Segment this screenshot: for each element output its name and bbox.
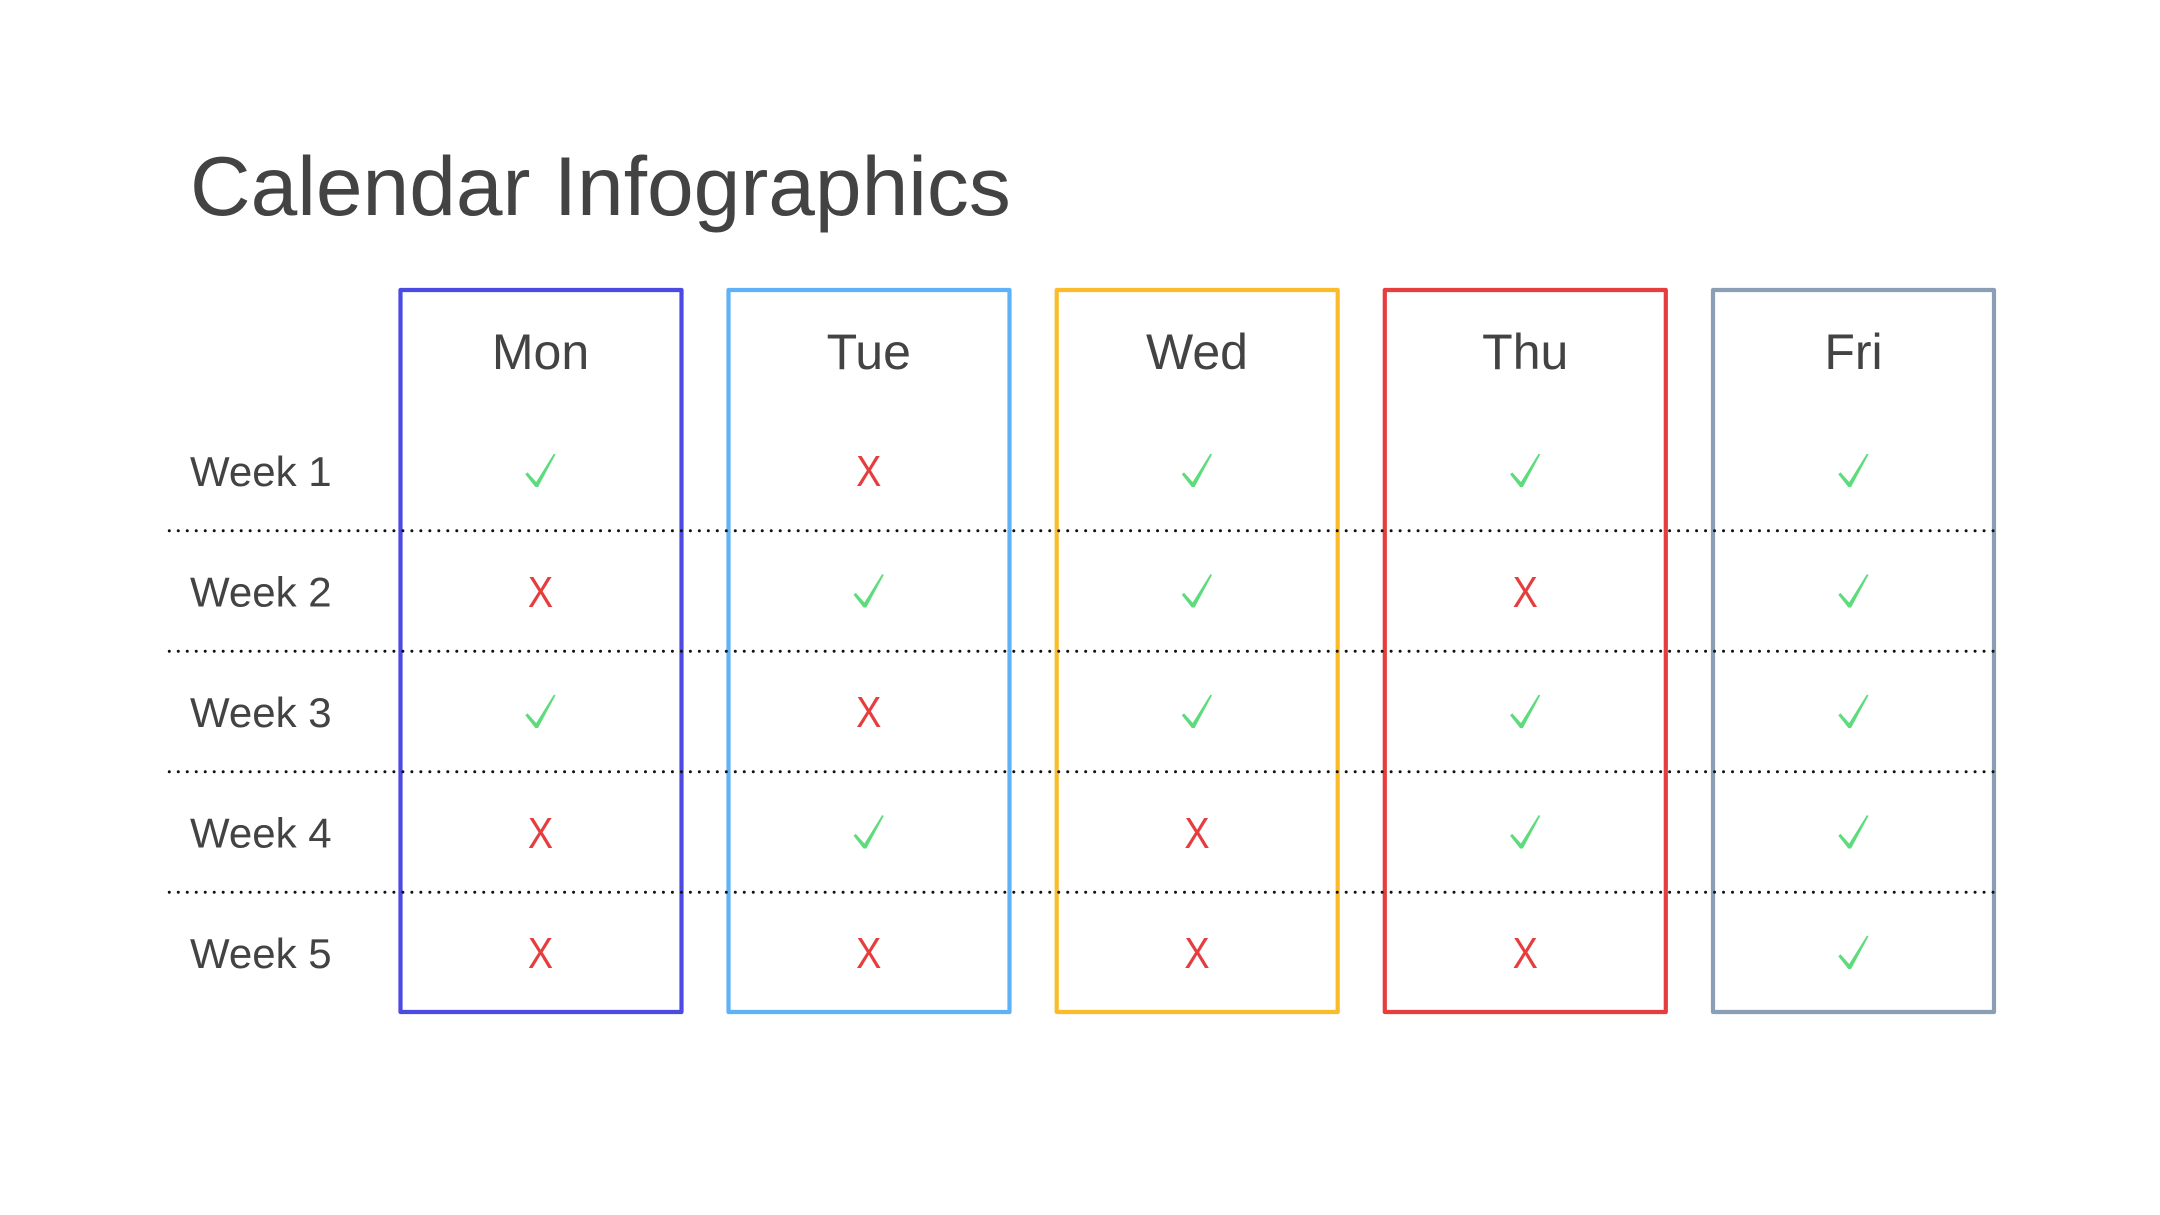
Tue week 3: cross: X	[856, 687, 881, 737]
Thu week 1: check	[1510, 454, 1540, 487]
column frame: Mon	[400, 290, 682, 1012]
Mon week 3: check	[525, 695, 556, 728]
heading: Thu: Thu	[1482, 324, 1568, 380]
week labels	[190, 448, 332, 977]
heading: Fri: Fri	[1824, 324, 1883, 380]
Tue week 5: cross: X	[856, 928, 881, 978]
Thu week 2: cross: X	[1513, 567, 1538, 617]
Thu week 3: check	[1510, 695, 1540, 728]
label: Week 2: Week 2	[190, 568, 332, 616]
Mon week 2: cross: X	[528, 567, 553, 617]
Tue week 2: check	[854, 574, 884, 608]
Fri week 5: check	[1838, 936, 1868, 969]
panel: Friday column	[1713, 290, 1994, 1012]
label: Week 4: Week 4	[190, 810, 332, 856]
column frame: Wed	[1057, 290, 1338, 1012]
label: Week 1: Week 1	[190, 448, 332, 495]
column frame: Fri	[1713, 290, 1994, 1012]
label: Week 3: Week 3	[190, 689, 332, 736]
Fri week 1: check	[1838, 454, 1868, 487]
label: Week 5: Week 5	[190, 930, 332, 977]
Fri week 3: check	[1838, 695, 1868, 728]
panel: Wednesday column	[1057, 290, 1338, 1012]
Fri week 2: check	[1838, 574, 1868, 608]
heading: Wed: Wed	[1146, 324, 1248, 380]
Tue week 4: check	[854, 815, 884, 848]
panel: Monday column	[400, 290, 682, 1012]
column frame: Thu	[1385, 290, 1666, 1012]
Fri week 4: check	[1838, 815, 1868, 848]
Mon week 5: cross: X	[528, 928, 553, 978]
heading: Tue: Tue	[827, 324, 911, 380]
Wed week 2: check	[1182, 574, 1212, 608]
Mon week 4: cross: X	[528, 808, 553, 858]
Thu week 5: cross: X	[1513, 928, 1538, 978]
column frame: Tue	[728, 290, 1010, 1012]
panel: Tuesday column	[728, 290, 1010, 1012]
Tue week 1: cross: X	[856, 446, 881, 496]
heading: Mon: Mon	[492, 324, 589, 380]
Mon week 1: check	[525, 454, 556, 487]
Wed week 3: check	[1182, 695, 1212, 728]
Wed week 5: cross: X	[1184, 928, 1210, 978]
title: Calendar Infographics	[190, 139, 1011, 233]
Thu week 4: check	[1510, 815, 1540, 848]
Wed week 1: check	[1182, 454, 1212, 487]
panel: Thursday column	[1385, 290, 1666, 1012]
Wed week 4: cross: X	[1184, 808, 1210, 858]
